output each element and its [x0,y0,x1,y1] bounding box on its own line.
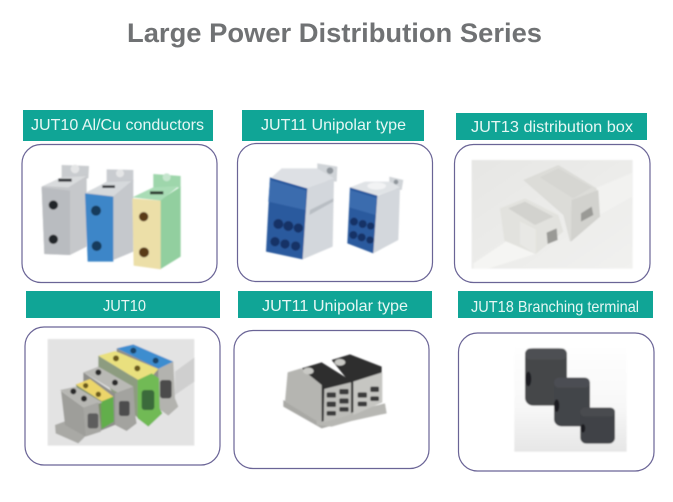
label banner [238,291,432,318]
panel: JUT13 distribution box [454,113,650,282]
card frame [22,144,217,282]
label banner [23,110,213,141]
card frame [234,330,429,468]
panel: JUT10 Al/Cu conductors [22,110,217,282]
product image: two blue distribution blocks [266,163,403,259]
label banner: JUT11 Unipolar type [262,298,408,315]
panel: JUT11 Unipolar type (bottom) [234,291,432,468]
label banner: JUT10 [103,298,146,315]
card frame [25,327,220,465]
label banner: JUT10 Al/Cu conductors [31,117,204,134]
card frame [454,144,650,282]
label banner [456,113,647,140]
label banner [242,110,424,141]
label banner: JUT18 Branching terminal [471,299,639,316]
product image: three terminal blocks [42,165,181,269]
label banner [458,291,653,318]
label banner [26,291,220,318]
label banner: JUT11 Unipolar type [261,117,406,134]
product image: white distribution boxes on rail [472,160,633,269]
panel: JUT10 [25,291,220,465]
label banner: JUT13 distribution box [471,119,633,136]
product image: three black branching terminals [514,341,627,452]
product image: coloured rail terminal blocks [48,339,194,446]
card frame [458,333,654,471]
card frame [238,144,432,282]
panel: JUT18 Branching terminal [458,291,654,471]
panel: JUT11 Unipolar type (top) [238,110,432,282]
product image: grey double distribution block [283,354,387,428]
title: Large Power Distribution Series [127,18,542,48]
